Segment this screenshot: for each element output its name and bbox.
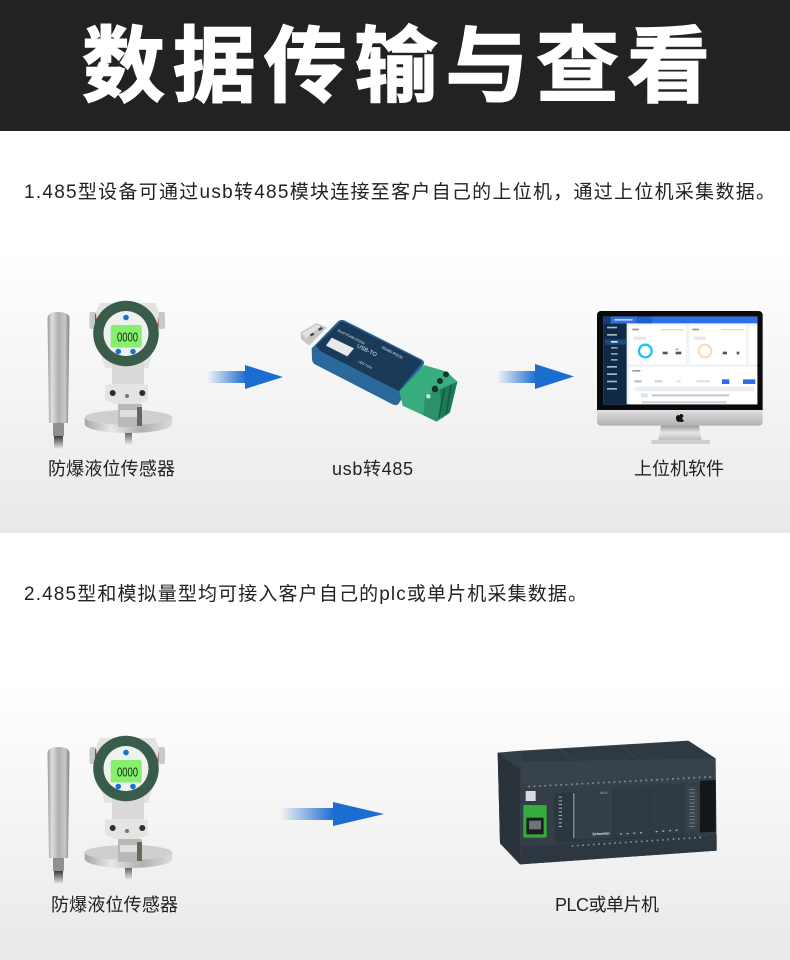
- text: step 1 description: 1.485型设备可通过usb转485模块连接至客户自己的上位机，通过上位机采集数据。: [24, 181, 775, 203]
- icon: usb to 485 module: RS485 RS232: [381, 346, 404, 360]
- icon: desktop monitor with software: [597, 311, 763, 444]
- label: host software: 上位机软件: [634, 459, 724, 479]
- arrow: sensor to usb module: [207, 365, 283, 389]
- icon: usb to 485 module: USB-TO: [356, 343, 378, 359]
- icon: liquid level sensors, row 2: [48, 736, 172, 884]
- icon: liquid level sensors, row 1: 0000: [117, 330, 138, 344]
- text: step 2 description: 2.485型和模拟量型均可接入客户自己的plc或单片机采集数据。: [24, 583, 587, 605]
- icon: usb to 485 module: Baud RS485 RS232: [337, 328, 366, 346]
- icon: plc controller: M241: [600, 791, 608, 795]
- panel: section 2 background: [0, 533, 790, 960]
- title band: [0, 0, 790, 131]
- icon: liquid level sensors, row 1: [48, 301, 172, 449]
- label: usb to 485: usb转485: [332, 459, 413, 479]
- icon: usb to 485 module: [301, 320, 457, 422]
- panel: section 1 background: [0, 131, 790, 533]
- title: 数据传输与查看: [82, 20, 710, 113]
- icon: liquid level sensors, row 2: 0000: [117, 766, 138, 780]
- label: sensor, row 1: 防爆液位传感器: [48, 459, 175, 479]
- icon: plc controller: Schneider: [592, 831, 611, 836]
- icon: plc controller: [498, 741, 717, 864]
- arrow: usb module to software: [497, 364, 574, 389]
- arrow: sensor to plc: [280, 802, 384, 826]
- icon: usb to 485 module: LED TxRx: [358, 360, 373, 370]
- label: plc or mcu: PLC或单片机: [555, 895, 659, 915]
- label: sensor, row 2: 防爆液位传感器: [51, 895, 178, 915]
